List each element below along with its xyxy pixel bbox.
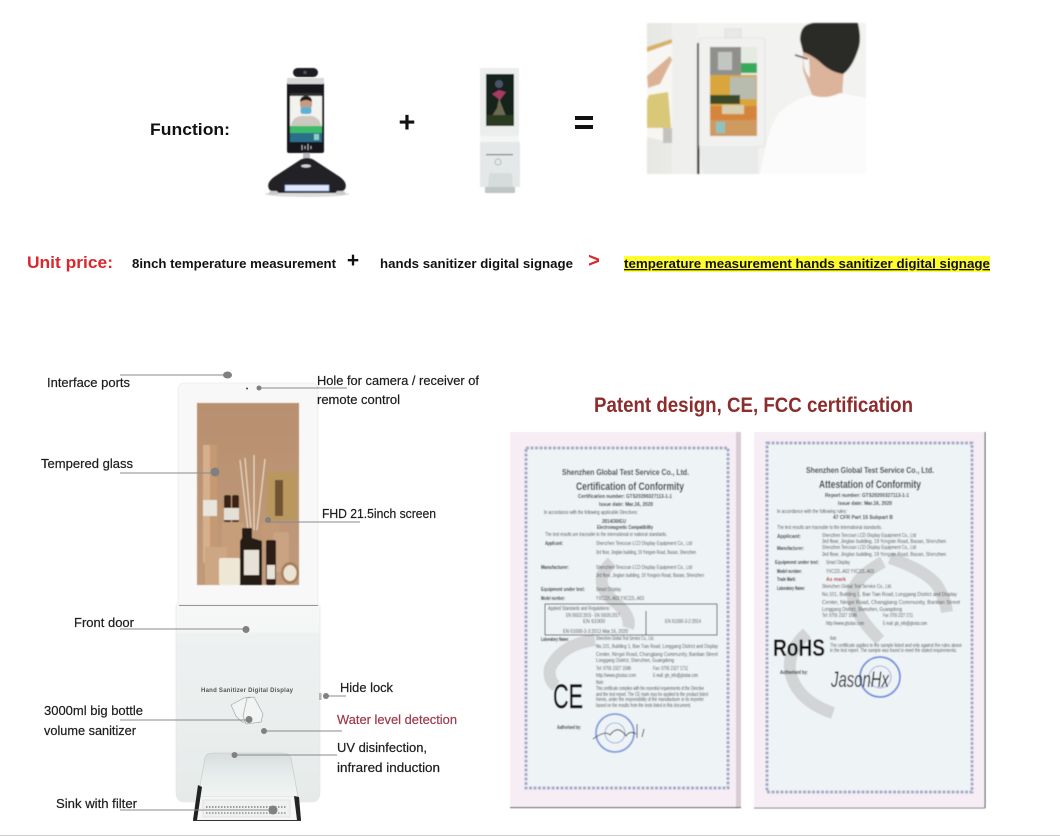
certificate: CE conformity: E-mail: gts_info@gtsstar.com [653,673,698,679]
stamp and signature [593,714,644,752]
callout: water level [261,712,457,734]
certificate: CE conformity: No.101, Building 1, Ban Tian Road, Longgang District and Display [596,644,718,650]
certificate: CE conformity: EN 61000-3-2:2014 [665,619,701,625]
equals sign [575,116,593,129]
hide lock [319,693,322,700]
callout: hide lock [323,680,393,699]
heading: certification: Patent design, CE, FCC certification [594,394,913,417]
plus sign: + [399,107,415,139]
certificate: CE conformity: EN 61000-3-3:2013 Mar.16, 2020 [563,629,628,635]
certificate: FCC attestation: E-mail: gts_info@gtsstar.com [883,621,927,627]
callout: sanitizer bottle: volume sanitizer [44,723,137,738]
callout: UV disinfection: UV disinfection, [337,740,427,755]
certificate: CE conformity: Tel: 0755 2327 1586 [596,666,631,672]
certificate: FCC attestation: Applicant: [777,534,801,540]
certificate: FCC attestation: The test results are traceable to the international standards. [777,525,882,531]
certificate: FCC attestation: Manufacturer: [777,546,804,552]
certificate: FCC attestation: Attestation of Conformity [819,479,922,491]
certificate: CE conformity: The test results are traceable to the international or national standards. [545,532,667,538]
certificate: FCC attestation: Laboratory Name: [777,586,805,592]
callout: water level: Water level detection [337,712,457,727]
certificate: CE conformity: Fax: 0755 2327 1711 [653,666,688,672]
certificate: CE conformity: Equipment under test: [541,587,585,593]
callout: sanitizer bottle: 3000ml big bottle [44,703,143,718]
callout: front door: Front door [74,615,135,630]
CE mark: CE [553,678,583,716]
callout: sink: Sink with filter [56,796,138,811]
certificate: CE conformity: 3rd floor, Jinglan building, 19 Yongxin Road, Baoan, Shenzhen [596,573,704,579]
callout: sanitizer bottle [44,703,252,738]
certificate: CE conformity: Shenzhen Tencoun LCD Display Equipment Co., Ltd [596,565,692,571]
certificate: CE conformity: Issue date: Mar.16, 2020 [599,502,653,508]
certificate: CE conformity: Center, Ningxi Road, Changjiang Community, Bantian Street [596,652,719,658]
certificate: FCC attestation: No.101, Building 1, Ban Tian Road, Longgang District and Display [822,592,957,598]
certificate: FCC attestation: YXC22L-A02 YXC22L-A03 [826,569,874,575]
certificate: FCC attestation: 3rd floor, Jinglan building, 19 Yongxin Road, Baoan, Shenzhen [822,552,946,558]
callout: camera hole [256,373,479,407]
bottom rule [0,835,1060,836]
person [760,23,866,174]
certificate: CE conformity: Certification number: GTS20200327113-1-1 [578,494,672,500]
certificate: FCC attestation: Shenzhen Tencoun LCD Display Equipment Co., Ltd [822,545,916,551]
certificate: FCC attestation: Trade Mark: [777,577,796,583]
certificate: FCC attestation: As mark [826,577,847,583]
certificate: CE conformity: EN 55032:2015 · EN 55035:2017 [566,613,620,619]
certificate: FCC attestation: Smart Display [826,560,850,566]
certificate: FCC attestation: Issue date: Mar.16, 2020 [838,501,892,507]
greater than sign: > [588,250,600,272]
certificate: CE conformity: Note: [596,680,604,686]
tray with filter [193,785,301,820]
callout: interface ports [47,372,232,390]
certificate: CE conformity: This certificate complies with the essential requirements of the Directive [596,686,704,692]
product photo: hand sanitizer digital signage [480,68,520,193]
callout: hide lock: Hide lock [340,680,393,695]
certificate: CE conformity: Shenzhen Global Test Service Co., Ltd. [596,636,654,642]
certificate: FCC attestation: in the test report. The sample was found to meet the stated requirements. [830,648,957,654]
text: 8 inch temperature measurement: 8inch temperature measurement [132,256,337,271]
product diagram: signage unit [176,383,322,820]
certificate: CE conformity: http://www.gtsstar.com [596,673,636,679]
icon: hands [231,697,263,724]
screen image [197,403,299,585]
certificate: CE conformity: Smart Display [596,587,621,593]
certificate: CE conformity: Shenzhen Global Test Service Co., Ltd. [562,468,689,477]
callout: camera hole: remote control [317,392,400,407]
certificate: FCC attestation: Shenzhen Global Test Service Co., Ltd. [806,466,934,475]
callout: tempered glass: Tempered glass [41,456,133,471]
stamp and signature: JasonHx [830,667,890,692]
certificate: FCC attestation: Fax: 0755 2327 1711 [883,613,913,619]
certificate: FCC attestation: Note: [830,636,837,642]
watermark [550,562,629,686]
label: unit price: Unit price: [27,253,113,272]
text: combined product: temperature measurement hands sanitizer digital signage [624,256,990,271]
callout: front door [74,615,250,633]
certificate: CE conformity: based on the results from the tests listed in this document. [596,703,691,709]
certificate: FCC attestation: Shenzhen Tencoun LCD Display Equipment Co., Ltd [822,533,916,539]
RoHS mark: RoHS [773,635,825,662]
certificate: CE conformity: Certification of Conformity [576,481,685,493]
wall unit screen [710,47,757,136]
certificate: CE conformity: 2014/30/EU [602,519,626,525]
certificate: FCC attestation: Authorised by: [780,670,808,676]
certificate: FCC attestation: The certificate applies to the sample listed and only against the rules above [830,643,962,649]
certificate: CE conformity [510,432,741,808]
certificate: FCC attestation: http://www.gtsstar.com [826,621,864,627]
certificate: CE conformity: 3rd floor, Jinglan building, 19 Yongxin Road, Baoan, Shenzhen [596,550,696,556]
callout: screen: FHD 21.5inch screen [322,506,436,521]
callout: tempered glass [41,456,220,476]
callout: sink [56,796,278,814]
certificate: FCC attestation: In accordance with the following rules: [777,509,847,515]
certificate: CE conformity: and the test report. The CE mark may be applied to the product listed [596,692,708,698]
callout: UV disinfection [232,740,440,775]
certificate: FCC attestation: Longgang District, Shenzhen, Guangdong [822,607,902,613]
certificate: CE conformity: herein, under the responsibility of the manufacturer or its importer [596,697,704,703]
certificate: CE conformity: Model number: [541,596,565,602]
product photo: temperature measurement terminal [265,68,349,197]
stamp and signature [830,657,900,697]
certificate: FCC attestation: Report number: GTS20200327113-1-1 [825,493,909,499]
certificate: CE conformity: In accordance with the following applicable Directives: [544,510,638,516]
certificate: CE conformity: Applied Standards and Regulations: [548,606,610,612]
certificate: FCC attestation: Equipment under test: [775,560,819,566]
certificate: FCC attestation [754,432,985,808]
callout: screen [265,506,436,523]
wall poster [647,39,672,143]
certificate: CE conformity: Electromagnetic Compatibility [597,525,653,531]
highlight [624,256,990,272]
heading: function: Function: [150,120,230,139]
upper panel [178,383,318,605]
certificate: FCC attestation: Tel: 0755 2327 1586 [822,613,857,619]
certificate: FCC attestation: Center, Ningxi Road, Changjiang Community, Bantian Street [822,600,961,606]
certificate: FCC attestation: 47 CFR Part 15 Subpart B [833,515,893,521]
photo: combined unit in use [647,23,866,174]
certificate: CE conformity: EN 61000 [583,619,605,625]
door printed label: Hand Sanitizer Digital Display [201,688,294,694]
certificate: CE conformity: Shenzhen Tencoun LCD Display Equipment Co., Ltd [596,541,692,547]
certificate: CE conformity: Manufacturer: [541,565,569,571]
certificate: CE conformity: Laboratory Name: [541,637,569,643]
callout: UV disinfection: infrared induction [337,760,440,775]
certificate: CE conformity: Authorised by: [557,725,581,731]
certificate: FCC attestation: 3rd floor, Jinglan building, 19 Yongxin Road, Baoan, Shenzhen [822,539,946,545]
unit price row [27,249,990,272]
certificate: CE conformity: Applicant: [545,541,563,547]
certificate: FCC attestation: Shenzhen Global Test Service Co., Ltd. [822,584,892,590]
watermark [790,558,947,713]
front door [176,605,320,802]
certificate: CE conformity: Longgang District, Shenzhen, Guangdong [596,658,674,664]
text: hands sanitizer digital signage: hands sanitizer digital signage [380,256,573,271]
certificate: FCC attestation: Model number: [777,569,802,575]
callout: interface ports: Interface ports [47,375,130,390]
plus sign: + [347,249,359,272]
callout: camera hole: Hole for camera / receiver of [317,373,479,388]
sink [198,753,298,797]
certificate: CE conformity: YXC22L-A02 YXC22L-A03 [596,596,644,602]
